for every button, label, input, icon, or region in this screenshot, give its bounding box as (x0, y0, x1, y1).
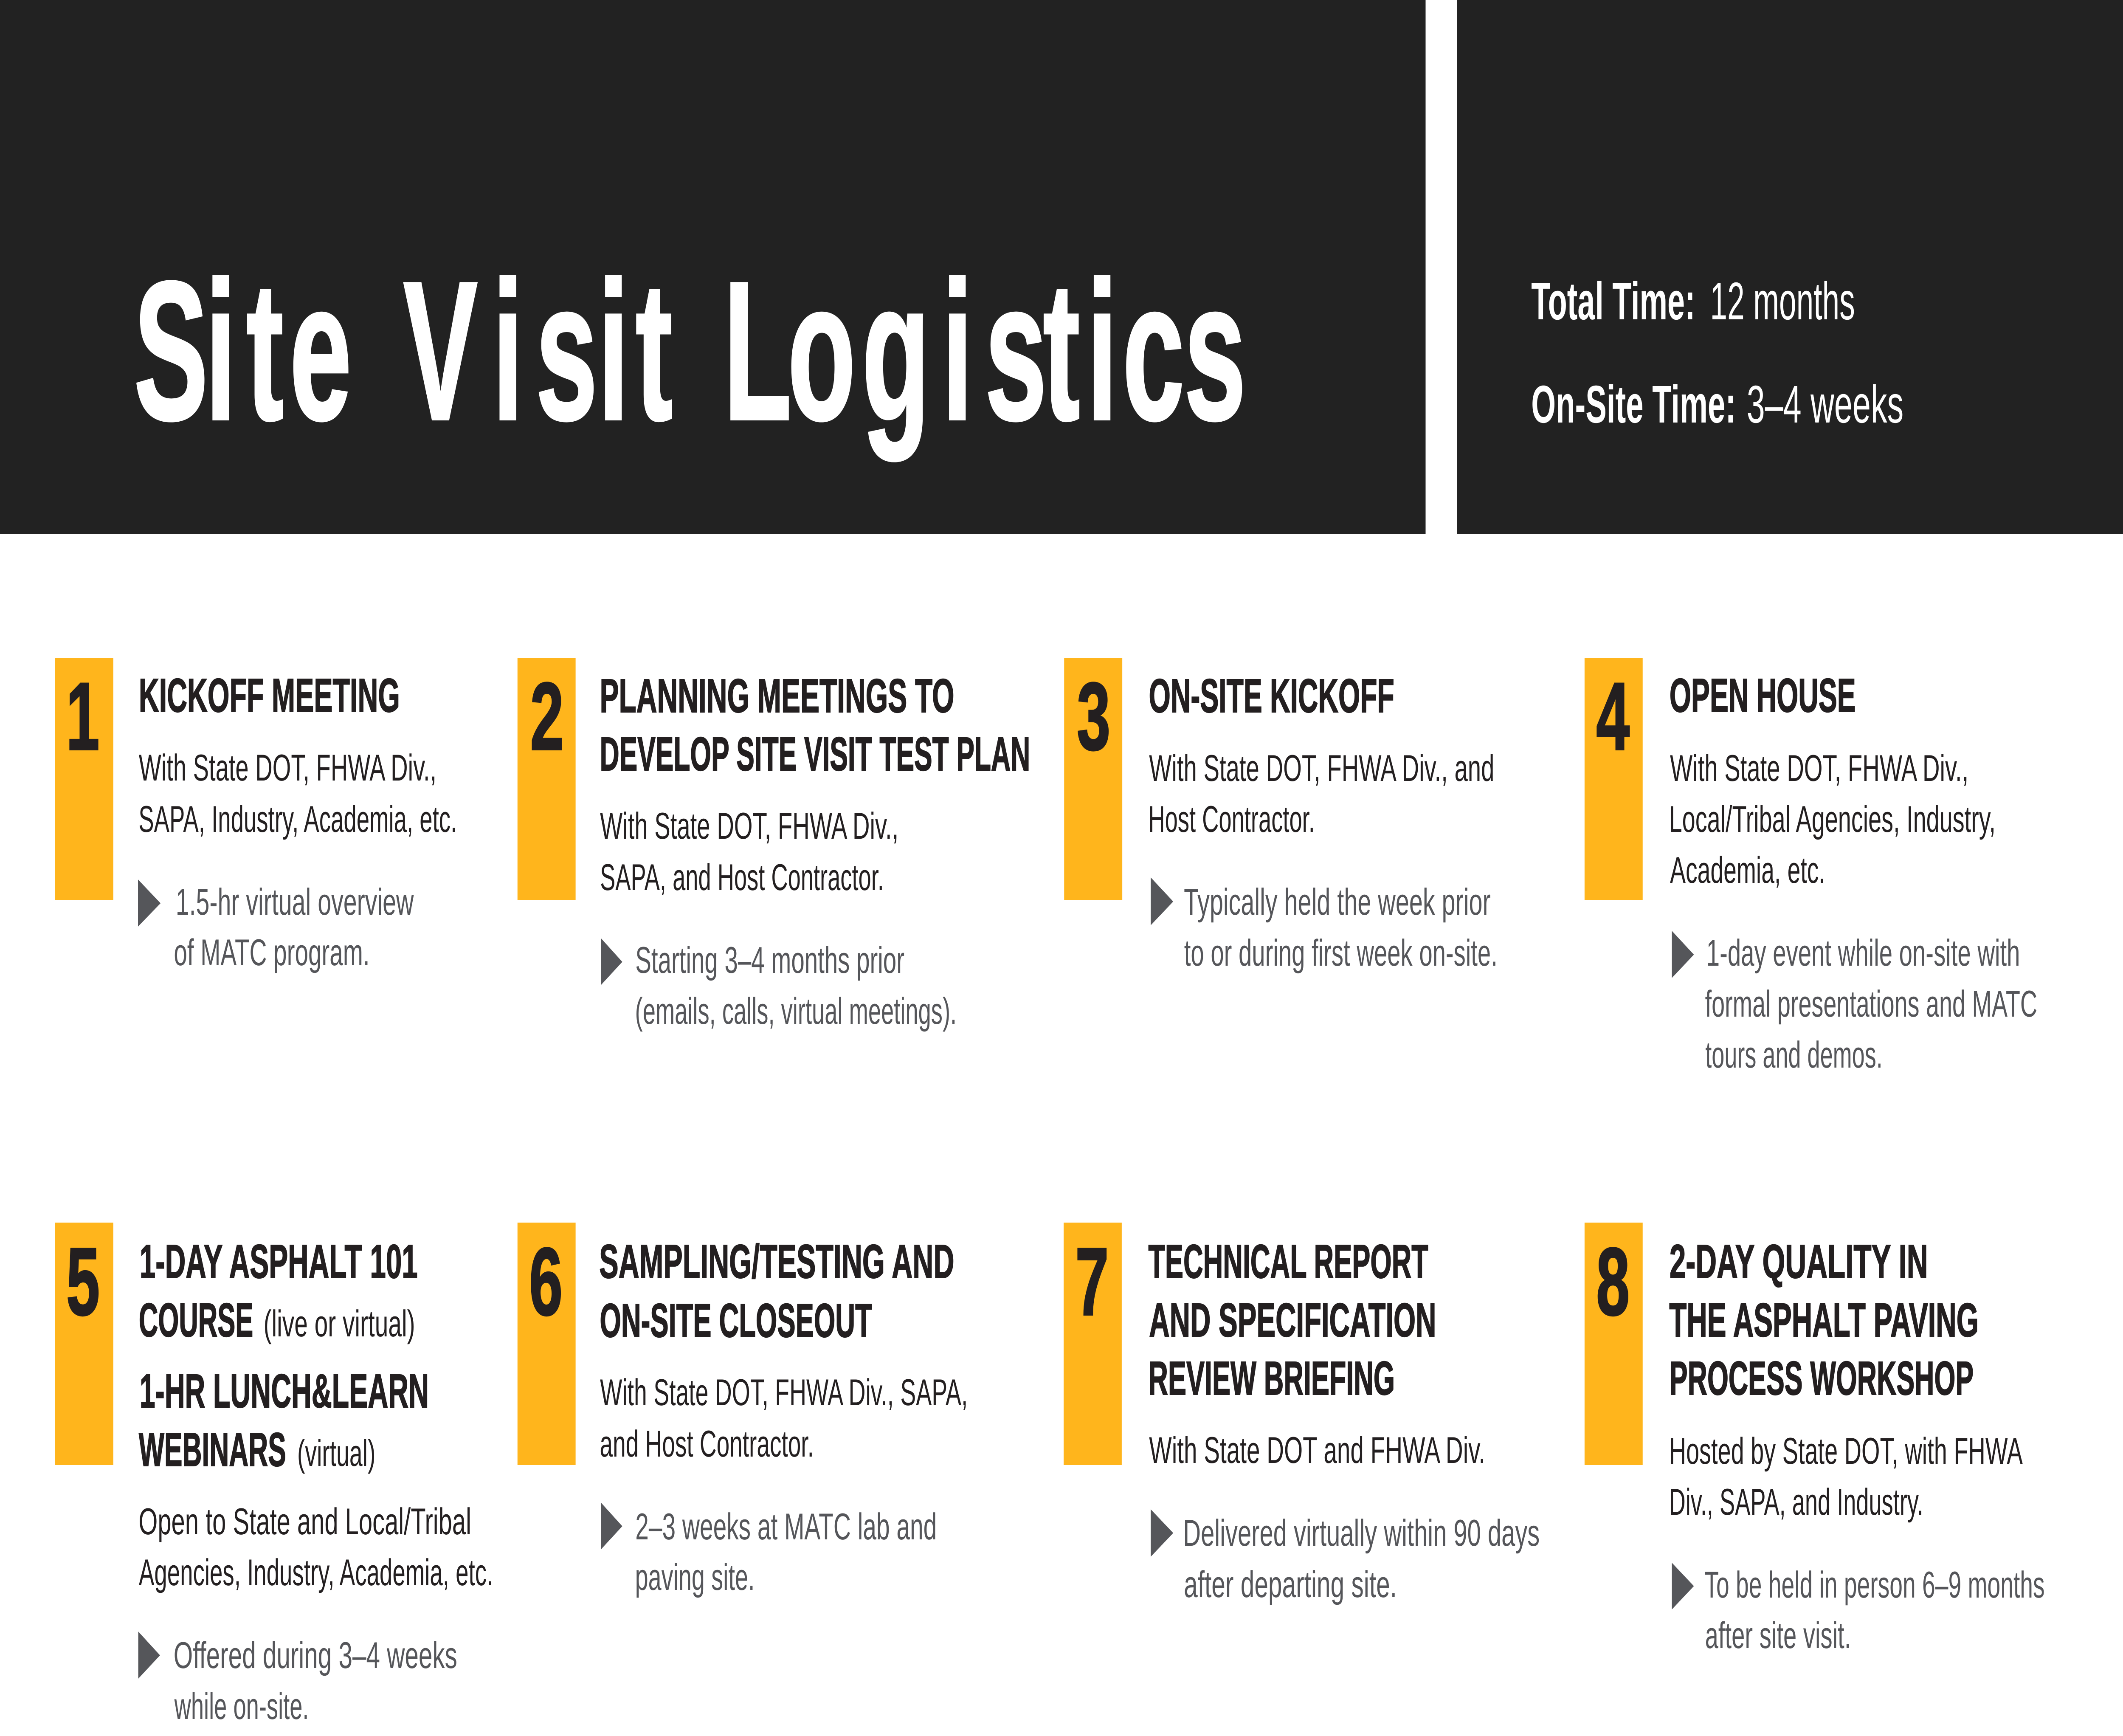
participants: With State DOT, FHWA Div., (600, 805, 898, 847)
number badge 2: 2 (530, 662, 563, 770)
number badge 1: 1 (66, 662, 99, 770)
heading: PROCESS WORKSHOP (1670, 1352, 1974, 1405)
number badge 3 (1064, 658, 1122, 900)
heading: 1-DAY ASPHALT 101 (140, 1235, 418, 1288)
heading: WEBINARS (139, 1423, 286, 1476)
number badge 8: 8 (1596, 1228, 1630, 1335)
participants: With State DOT, FHWA Div., SAPA, (600, 1371, 968, 1413)
number badge 4 (1585, 658, 1643, 900)
panel: step 6 sampling and testing (518, 1223, 968, 1598)
participants: With State DOT, FHWA Div., and (1149, 747, 1494, 789)
panel: step 4 open house (1585, 658, 2037, 1076)
heading: ON-SITE CLOSEOUT (600, 1294, 872, 1347)
heading: COURSE (139, 1294, 253, 1347)
participants: and Host Contractor. (600, 1423, 814, 1465)
note: Offered during 3–4 weeks (174, 1634, 457, 1676)
heading: (live or virtual) (264, 1302, 415, 1344)
heading: ON-SITE KICKOFF (1149, 669, 1394, 722)
note: while on-site. (174, 1685, 309, 1727)
heading: REVIEW BRIEFING (1148, 1352, 1395, 1405)
participants: Academia, etc. (1670, 849, 1825, 891)
note (1183, 1512, 1540, 1605)
participants: Agencies, Industry, Academia, etc. (139, 1551, 493, 1593)
heading (599, 1235, 955, 1347)
icon: arrow (138, 879, 160, 927)
participants: Hosted by State DOT, with FHWA (1669, 1430, 2023, 1472)
participants (600, 805, 898, 898)
icon: arrow (138, 1632, 160, 1679)
note (174, 1634, 457, 1727)
icon: arrow (601, 1502, 622, 1550)
note (1705, 932, 2037, 1076)
number badge 6: 6 (529, 1228, 563, 1335)
on-site time (1531, 375, 1903, 434)
note: (emails, calls, virtual meetings). (635, 990, 957, 1032)
note: tours and demos. (1705, 1034, 1883, 1076)
participants (600, 1371, 968, 1465)
note (1704, 1564, 2045, 1656)
note: Typically held the week prior (1184, 881, 1491, 923)
icon: arrow (1151, 877, 1173, 925)
heading: AND SPECIFICATION (1149, 1294, 1436, 1347)
number badge 3: 3 (1077, 662, 1110, 770)
title: Logistics (724, 240, 1246, 462)
note: to or during first week on-site. (1184, 932, 1498, 974)
participants: SAPA, Industry, Academia, etc. (138, 798, 457, 840)
heading (139, 1235, 429, 1476)
heading (600, 669, 1030, 781)
participants: With State DOT, FHWA Div., (1670, 747, 1968, 789)
number badge 2 (518, 658, 576, 900)
title: Site (134, 240, 352, 461)
participants (1148, 747, 1494, 840)
participants (138, 747, 457, 840)
panel: step 1 kickoff meeting (55, 658, 457, 973)
icon: arrow (601, 938, 622, 985)
panel: step 7 technical report (1064, 1223, 1540, 1605)
panel: step 5 asphalt 101 and webinars (55, 1223, 493, 1727)
heading: 2-DAY QUALITY IN (1670, 1235, 1928, 1288)
heading: SAMPLING/TESTING AND (599, 1235, 955, 1288)
heading: TECHNICAL REPORT (1148, 1235, 1428, 1288)
number badge 7 (1064, 1223, 1122, 1465)
icon: arrow (1151, 1509, 1173, 1557)
participants: Local/Tribal Agencies, Industry, (1669, 798, 1996, 840)
panel: step 8 workshop (1585, 1223, 2045, 1656)
participants: Host Contractor. (1148, 798, 1315, 840)
note: of MATC program. (174, 931, 370, 973)
note: after site visit. (1705, 1614, 1851, 1656)
note: Starting 3–4 months prior (635, 939, 904, 981)
on-site time: 3–4 weeks (1747, 375, 1903, 434)
number badge 5: 5 (66, 1228, 100, 1335)
number badge 7: 7 (1076, 1228, 1109, 1335)
total time: 12 months (1710, 272, 1855, 331)
note (635, 939, 957, 1032)
note: Delivered virtually within 90 days (1183, 1512, 1540, 1554)
heading (1669, 1235, 1979, 1405)
total time: Total Time: (1531, 272, 1695, 331)
participants: Div., SAPA, and Industry. (1669, 1481, 1923, 1523)
note: 1-day event while on-site with (1706, 932, 2020, 974)
heading: PLANNING MEETINGS TO (600, 669, 955, 722)
number badge 6 (518, 1223, 576, 1465)
participants: With State DOT, FHWA Div., (139, 747, 436, 789)
note: 1.5-hr virtual overview (176, 881, 414, 923)
note: formal presentations and MATC (1705, 983, 2037, 1025)
header panel: title (0, 0, 1426, 534)
note: after departing site. (1184, 1563, 1397, 1605)
heading (1148, 1235, 1436, 1405)
note: To be held in person 6–9 months (1704, 1564, 2045, 1606)
participants: With State DOT and FHWA Div. (1149, 1429, 1485, 1471)
participants (138, 1500, 493, 1593)
heading: OPEN HOUSE (1670, 669, 1856, 722)
number badge 1 (55, 658, 113, 900)
panel: step 2 planning meetings (518, 658, 1030, 1032)
header panel: time summary (1457, 0, 2123, 534)
on-site time: On-Site Time: (1531, 375, 1736, 434)
participants: Open to State and Local/Tribal (138, 1500, 471, 1542)
note (174, 881, 414, 973)
number badge 4: 4 (1596, 662, 1630, 770)
heading: DEVELOP SITE VISIT TEST PLAN (600, 727, 1030, 781)
participants: SAPA, and Host Contractor. (600, 856, 884, 898)
icon: arrow (1672, 931, 1694, 978)
participants (1669, 1430, 2023, 1523)
heading: THE ASPHALT PAVING (1669, 1294, 1979, 1347)
number badge 5 (55, 1223, 113, 1465)
icon: arrow (1672, 1563, 1694, 1609)
number badge 8 (1585, 1223, 1643, 1465)
note (1184, 881, 1498, 974)
heading: 1-HR LUNCH&LEARN (140, 1364, 429, 1418)
heading: (virtual) (297, 1432, 375, 1474)
note (635, 1505, 937, 1598)
panel: step 3 on-site kickoff (1064, 658, 1498, 974)
heading: KICKOFF MEETING (139, 669, 400, 722)
note: 2–3 weeks at MATC lab and (635, 1505, 937, 1547)
note: paving site. (635, 1556, 755, 1598)
participants (1669, 747, 1996, 891)
title: Visit (403, 240, 673, 461)
total time (1531, 272, 1855, 331)
